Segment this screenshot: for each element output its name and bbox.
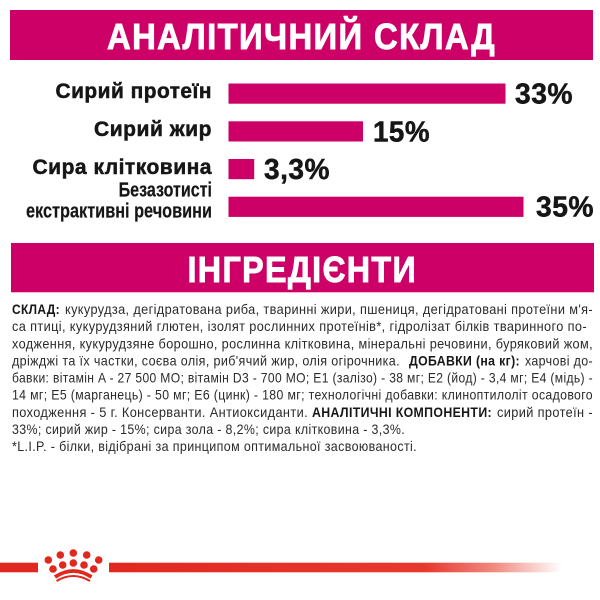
text block: ingredients list: 33%; сирий жир - 15%; сира зола - 8,2%; сира клітковина - 3,3%.: [12, 422, 405, 437]
heading banner: analytical composition: АНАЛІТИЧНИЙ СКЛАД: [107, 15, 496, 57]
text block: ingredients list: СКЛАД:: [12, 302, 60, 317]
text block: ingredients list: харчові до-: [525, 353, 593, 368]
bar row: crude protein: 33%: [515, 78, 573, 110]
heading banner: ingredients: ІНГРЕДІЄНТИ: [188, 249, 417, 290]
bar row: crude fat: 15%: [373, 117, 430, 149]
text block: ingredients list: дріжджі та їх частки, соєва олія, риб'ячий жир, олія огірочника.: [12, 353, 400, 368]
text block: ingredients list: сирий протеїн -: [497, 405, 593, 420]
bar row: crude fat: Сирий жир: [94, 117, 212, 141]
bar row: crude fibre: 3,3%: [264, 154, 330, 186]
text block: ingredients list: ДОБАВКИ (на кг):: [409, 353, 520, 368]
bar row: crude protein: Сирий протеїн: [56, 79, 212, 103]
text block: ingredients list: [12, 302, 593, 454]
text block: ingredients list: походження - 5 г. Консерванти. Антиоксиданти.: [12, 405, 308, 420]
bar row: crude fibre: [32, 154, 330, 186]
heading banner: analytical composition: [10, 10, 593, 60]
heading banner: ingredients: [11, 243, 594, 292]
panel: analytical composition: [10, 10, 594, 224]
bar row: nitrogen-free extract: екстрактивні речовини: [26, 200, 212, 222]
text block: ingredients list: АНАЛІТИЧНІ КОМПОНЕНТИ:: [312, 405, 492, 420]
footer rule: left segment: [0, 563, 38, 572]
bar row: nitrogen-free extract: 35%: [536, 192, 594, 224]
bar row: crude fat: [94, 117, 430, 149]
bar row: crude fibre: Сира клітковина: [32, 155, 213, 179]
icon: Royal Canin crown logo: [44, 549, 102, 581]
bar row: nitrogen-free extract: [26, 180, 594, 224]
bar row: crude protein: [56, 78, 573, 110]
text block: ingredients list: *L.I.P. - білки, відібрані за принципом оптимальної засвоюваності.: [12, 439, 417, 454]
bar row: nitrogen-free extract: Безазотисті: [119, 180, 212, 202]
footer rule: right fading segment: [109, 563, 562, 572]
